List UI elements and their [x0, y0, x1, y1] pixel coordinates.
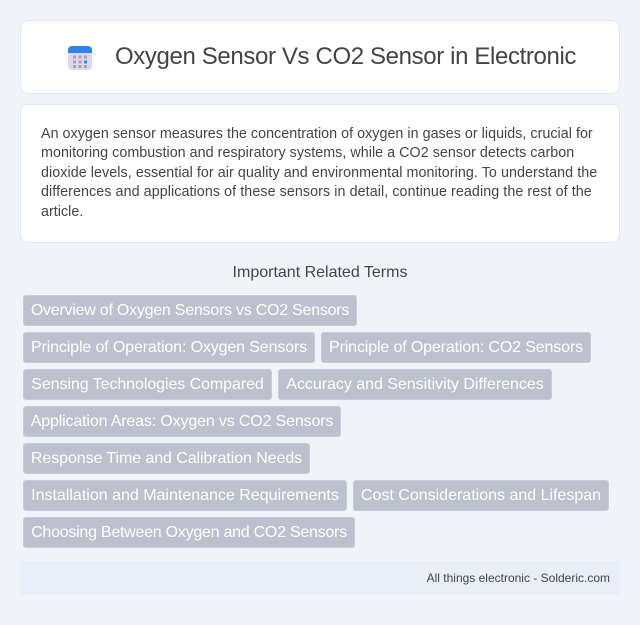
tag	[23, 369, 272, 400]
tag	[23, 480, 347, 511]
tag	[23, 295, 357, 326]
tag: Choosing Between Oxygen and CO2 Sensors	[31, 524, 347, 541]
tag: Principle of Operation: CO2 Sensors	[329, 339, 583, 356]
text block: intro paragraph: monitoring combustion and respiratory systems, while a CO2 sensor detects carbon	[41, 145, 574, 161]
icon: calendar	[68, 46, 92, 70]
title: Oxygen Sensor Vs CO2 Sensor in Electronic	[115, 43, 576, 70]
heading: related terms: Important Related Terms	[233, 264, 407, 281]
tag: Sensing Technologies Compared	[31, 376, 264, 393]
tag: Principle of Operation: Oxygen Sensors	[31, 339, 307, 356]
text block: intro paragraph: article.	[41, 204, 83, 220]
tag: Response Time and Calibration Needs	[31, 450, 302, 467]
tag	[23, 406, 341, 437]
tag: Overview of Oxygen Sensors vs CO2 Sensors	[31, 302, 349, 319]
text block: intro paragraph: An oxygen sensor measures the concentration of oxygen in gases or liquids, crucial for	[41, 126, 593, 142]
tag	[23, 443, 310, 474]
footer	[20, 561, 620, 595]
panel: title card	[20, 20, 620, 94]
tag: Installation and Maintenance Requirements	[31, 487, 339, 504]
panel: term tags	[23, 295, 609, 548]
tag	[23, 517, 355, 548]
tag: Application Areas: Oxygen vs CO2 Sensors	[31, 413, 333, 430]
text block: intro paragraph: differences and applications of these sensors in detail, continue reading the rest of the	[41, 184, 592, 200]
tag	[278, 369, 552, 400]
text block: intro paragraph	[41, 126, 597, 220]
tag	[353, 480, 609, 511]
text block: intro paragraph: dioxide levels, essential for air quality and environmental monitoring. To understand the	[41, 165, 597, 181]
footer text: All things electronic - Solderic.com	[427, 571, 610, 585]
tag	[23, 332, 315, 363]
tag	[321, 332, 591, 363]
panel: intro text	[20, 104, 620, 243]
tag: Cost Considerations and Lifespan	[361, 487, 601, 504]
tag: Accuracy and Sensitivity Differences	[286, 376, 544, 393]
